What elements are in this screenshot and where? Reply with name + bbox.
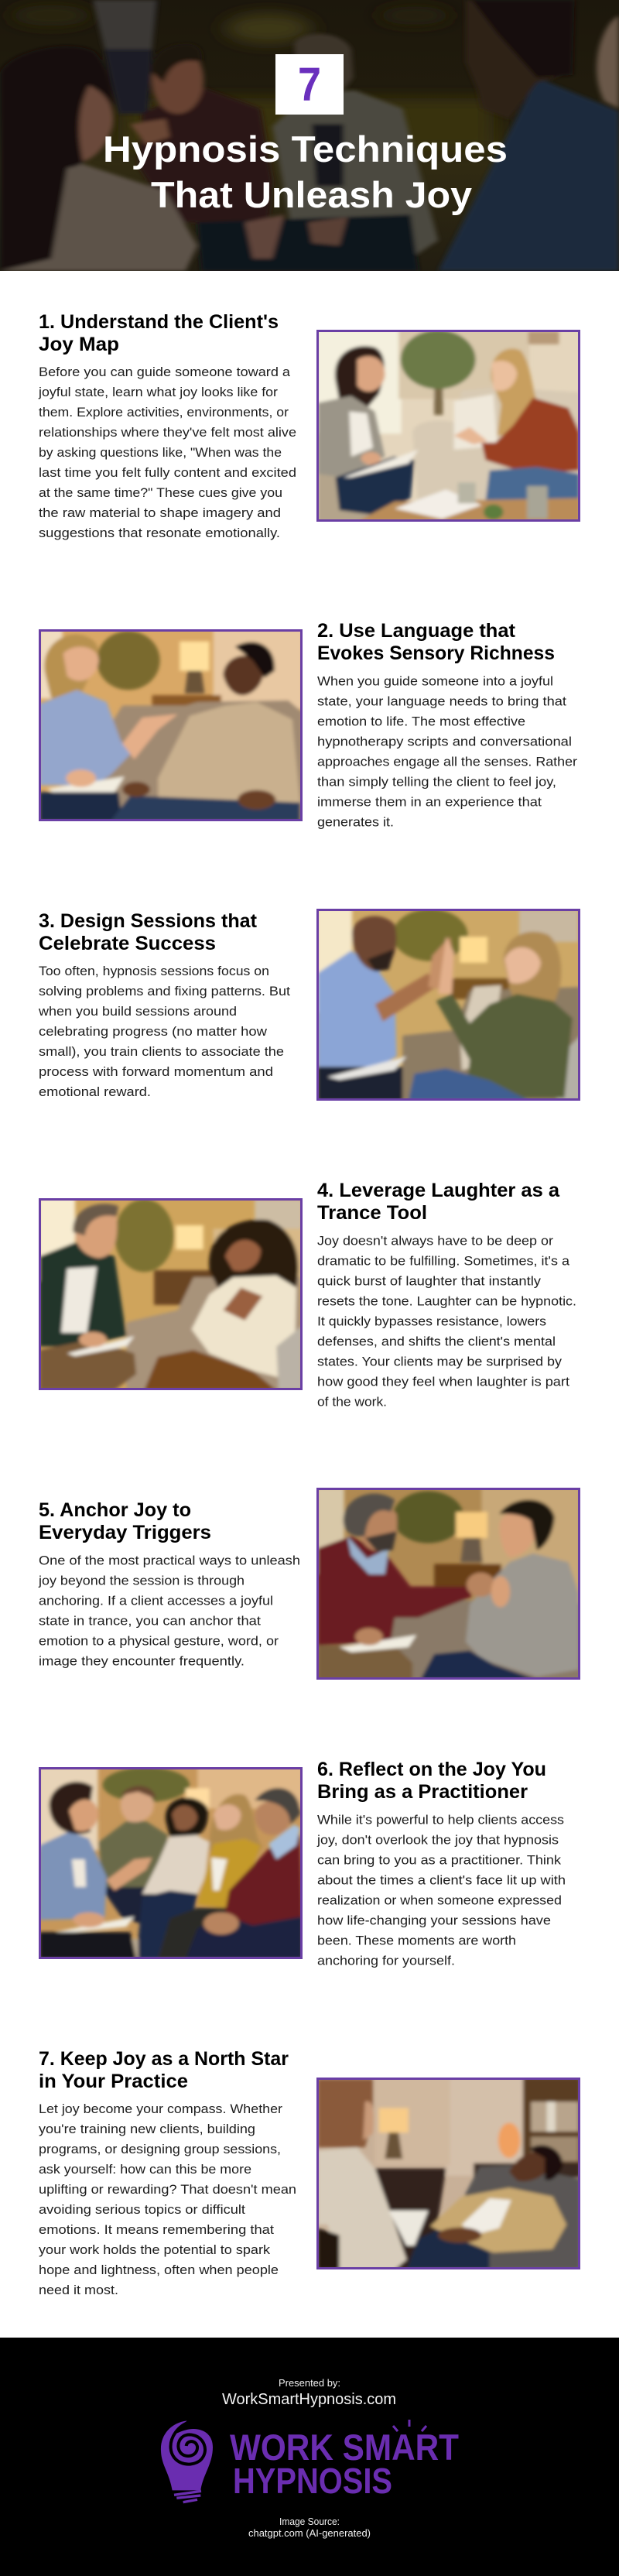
body text 1: relationships where they've felt most alive	[39, 425, 296, 440]
photo: laughing pair	[39, 1198, 303, 1390]
panel: technique 3	[38, 909, 580, 1101]
heading 6: Bring as a Practitioner	[317, 1781, 528, 1803]
body text 5: emotion to a physical gesture, word, or	[39, 1633, 279, 1649]
body text 1: last time you felt fully content and excited	[39, 465, 296, 480]
photo: high five	[316, 909, 580, 1101]
body text 7: emotions. It means remembering that	[39, 2222, 274, 2237]
heading 1	[39, 311, 279, 355]
body text 5: anchoring. If a client accesses a joyful	[39, 1593, 273, 1608]
body text 7: hope and lightness, often when people	[39, 2263, 279, 2277]
body text 6: can bring to you as a practitioner. Think	[317, 1853, 562, 1867]
photo: group session	[39, 1767, 303, 1959]
body text 2: than simply telling the client to feel joy,	[317, 774, 556, 790]
body text 3: Too often, hypnosis sessions focus on	[39, 964, 269, 978]
icon: spiral light bulb	[161, 2420, 213, 2503]
body text 7: your work holds the potential to spark	[39, 2242, 271, 2257]
body text 2: approaches engage all the senses. Rather	[317, 754, 577, 769]
body text 3: solving problems and fixing patterns. But	[39, 984, 290, 999]
heading 5	[39, 1499, 211, 1543]
body text 7: programs, or designing group sessions,	[39, 2142, 281, 2156]
image source credit	[248, 2516, 371, 2539]
heading 4	[317, 1180, 560, 1224]
number badge	[275, 54, 344, 115]
body text 4: states. Your clients may be surprised by	[317, 1355, 563, 1368]
panel: technique 7	[39, 2048, 580, 2297]
body text 5: image they encounter frequently.	[39, 1653, 245, 1669]
body text 7: you're training new clients, building	[39, 2122, 255, 2136]
body text 3: emotional reward.	[39, 1084, 151, 1099]
body text 6	[316, 1813, 566, 1968]
body text 7: ask yourself: how can this be more	[39, 2162, 251, 2177]
body text 5: joy beyond the session is through	[38, 1573, 245, 1588]
body text 3: process with forward momentum and	[39, 1064, 273, 1079]
heading 1: 1. Understand the Client's	[39, 311, 279, 333]
body text 2: state, your language needs to bring that	[317, 694, 566, 709]
body text 3: celebrating progress (no matter how	[39, 1024, 268, 1039]
photo: practitioner and laughing client	[39, 629, 303, 821]
body text 4: Joy doesn't always have to be deep or	[317, 1234, 553, 1248]
body text 2: immerse them in an experience that	[317, 794, 542, 810]
image source credit: Image Source:	[279, 2516, 340, 2527]
heading 7: in Your Practice	[39, 2071, 188, 2092]
presented by: Presented by:	[279, 2377, 340, 2389]
website: WorkSmartHypnosis.com	[222, 2390, 396, 2408]
number badge: 7	[298, 58, 321, 111]
body text 5: One of the most practical ways to unleash	[39, 1553, 300, 1568]
logo wordmark: WORK SMART	[230, 2427, 459, 2468]
body text 7: avoiding serious topics or difficult	[39, 2202, 245, 2217]
title: Hypnosis Techniques	[103, 128, 508, 170]
body text 1: the raw material to shape imagery and	[39, 505, 281, 520]
body text 7: uplifting or rewarding? That doesn't mean	[39, 2182, 296, 2197]
photo: client reclining in session	[316, 2078, 580, 2269]
body text 1: at the same time?" These cues give you	[39, 485, 282, 500]
heading 2	[317, 620, 555, 664]
heading 2: 2. Use Language that	[317, 620, 516, 642]
heading 6: 6. Reflect on the Joy You	[317, 1759, 546, 1780]
body text 6: joy, don't overlook the joy that hypnosis	[316, 1833, 559, 1847]
body text 6: about the times a client's face lit up with	[317, 1873, 566, 1887]
body text 5: state in trance, you can anchor that	[39, 1613, 261, 1629]
photo: practitioner encouraging client	[316, 1488, 580, 1680]
body text 3: when you build sessions around	[38, 1004, 237, 1019]
body text 4: dramatic to be fulfilling. Sometimes, it's a	[317, 1254, 570, 1268]
photo: two women talking on sofa	[316, 330, 580, 522]
body text 1: suggestions that resonate emotionally.	[39, 526, 280, 540]
heading 4: 4. Leverage Laughter as a	[317, 1180, 560, 1201]
icon: rays over the A	[393, 2420, 426, 2431]
body text 1: joyful state, learn what joy looks like for	[38, 385, 278, 399]
body text 3	[38, 964, 290, 1099]
heading 5: 5. Anchor Joy to	[39, 1499, 191, 1521]
heading 7: 7. Keep Joy as a North Star	[39, 2048, 289, 2070]
body text 4: how good they feel when laughter is part	[317, 1375, 569, 1389]
header photo: group sitting outdoors	[0, 0, 619, 271]
panel: technique 6	[39, 1759, 566, 1968]
body text 7: Let joy become your compass. Whether	[39, 2102, 282, 2116]
heading 2: Evokes Sensory Richness	[317, 642, 555, 664]
body text 6: been. These moments are worth	[317, 1934, 516, 1947]
panel: technique 1	[38, 311, 580, 540]
body text 6: realization or when someone expressed	[317, 1893, 562, 1907]
body text 3: small), you train clients to associate the	[39, 1044, 284, 1059]
body text 1: them. Explore activities, environments, or	[39, 405, 289, 420]
body text 4: of the work.	[317, 1395, 387, 1409]
panel: technique 2	[39, 620, 577, 830]
logo	[161, 2420, 459, 2502]
body text 1	[38, 365, 296, 540]
footer	[0, 2338, 619, 2576]
panel: technique 4	[39, 1180, 576, 1409]
body text 1: Before you can guide someone toward a	[39, 365, 291, 379]
heading 7	[39, 2048, 289, 2092]
body text 4: It quickly bypasses resistance, lowers	[317, 1314, 546, 1328]
body text 1: by asking questions like, "When was the	[39, 445, 282, 460]
heading 1: Joy Map	[39, 334, 119, 355]
heading 3: Celebrate Success	[39, 933, 216, 954]
body text 4: resets the tone. Laughter can be hypnotic.	[317, 1294, 576, 1308]
body text 4: defenses, and shifts the client's mental	[317, 1334, 556, 1348]
body text 6: While it's powerful to help clients access	[317, 1813, 564, 1827]
body text 7	[39, 2102, 296, 2297]
body text 6: anchoring for yourself.	[317, 1954, 455, 1968]
heading 3	[39, 910, 258, 954]
body text 6: how life-changing your sessions have	[317, 1913, 551, 1927]
header banner	[0, 0, 619, 271]
body text 2: hypnotherapy scripts and conversational	[317, 734, 572, 749]
heading 4: Trance Tool	[317, 1202, 427, 1224]
heading 5: Everyday Triggers	[39, 1522, 211, 1543]
heading 6	[317, 1759, 546, 1803]
panel: technique 5	[38, 1488, 580, 1680]
heading 3: 3. Design Sessions that	[39, 910, 258, 932]
body text 2	[317, 673, 577, 830]
body text 5	[38, 1553, 300, 1669]
body text 2: generates it.	[317, 814, 394, 830]
body text 4: quick burst of laughter that instantly	[317, 1274, 542, 1288]
title: That Unleash Joy	[151, 174, 472, 215]
image source credit: chatgpt.com (AI-generated)	[248, 2527, 371, 2539]
body text 2: emotion to life. The most effective	[317, 714, 525, 729]
body text 4	[317, 1234, 576, 1409]
title	[103, 128, 508, 215]
logo: HYPNOSIS	[233, 2461, 392, 2501]
body text 7: need it most.	[39, 2283, 118, 2297]
body text 2: When you guide someone into a joyful	[317, 673, 553, 689]
